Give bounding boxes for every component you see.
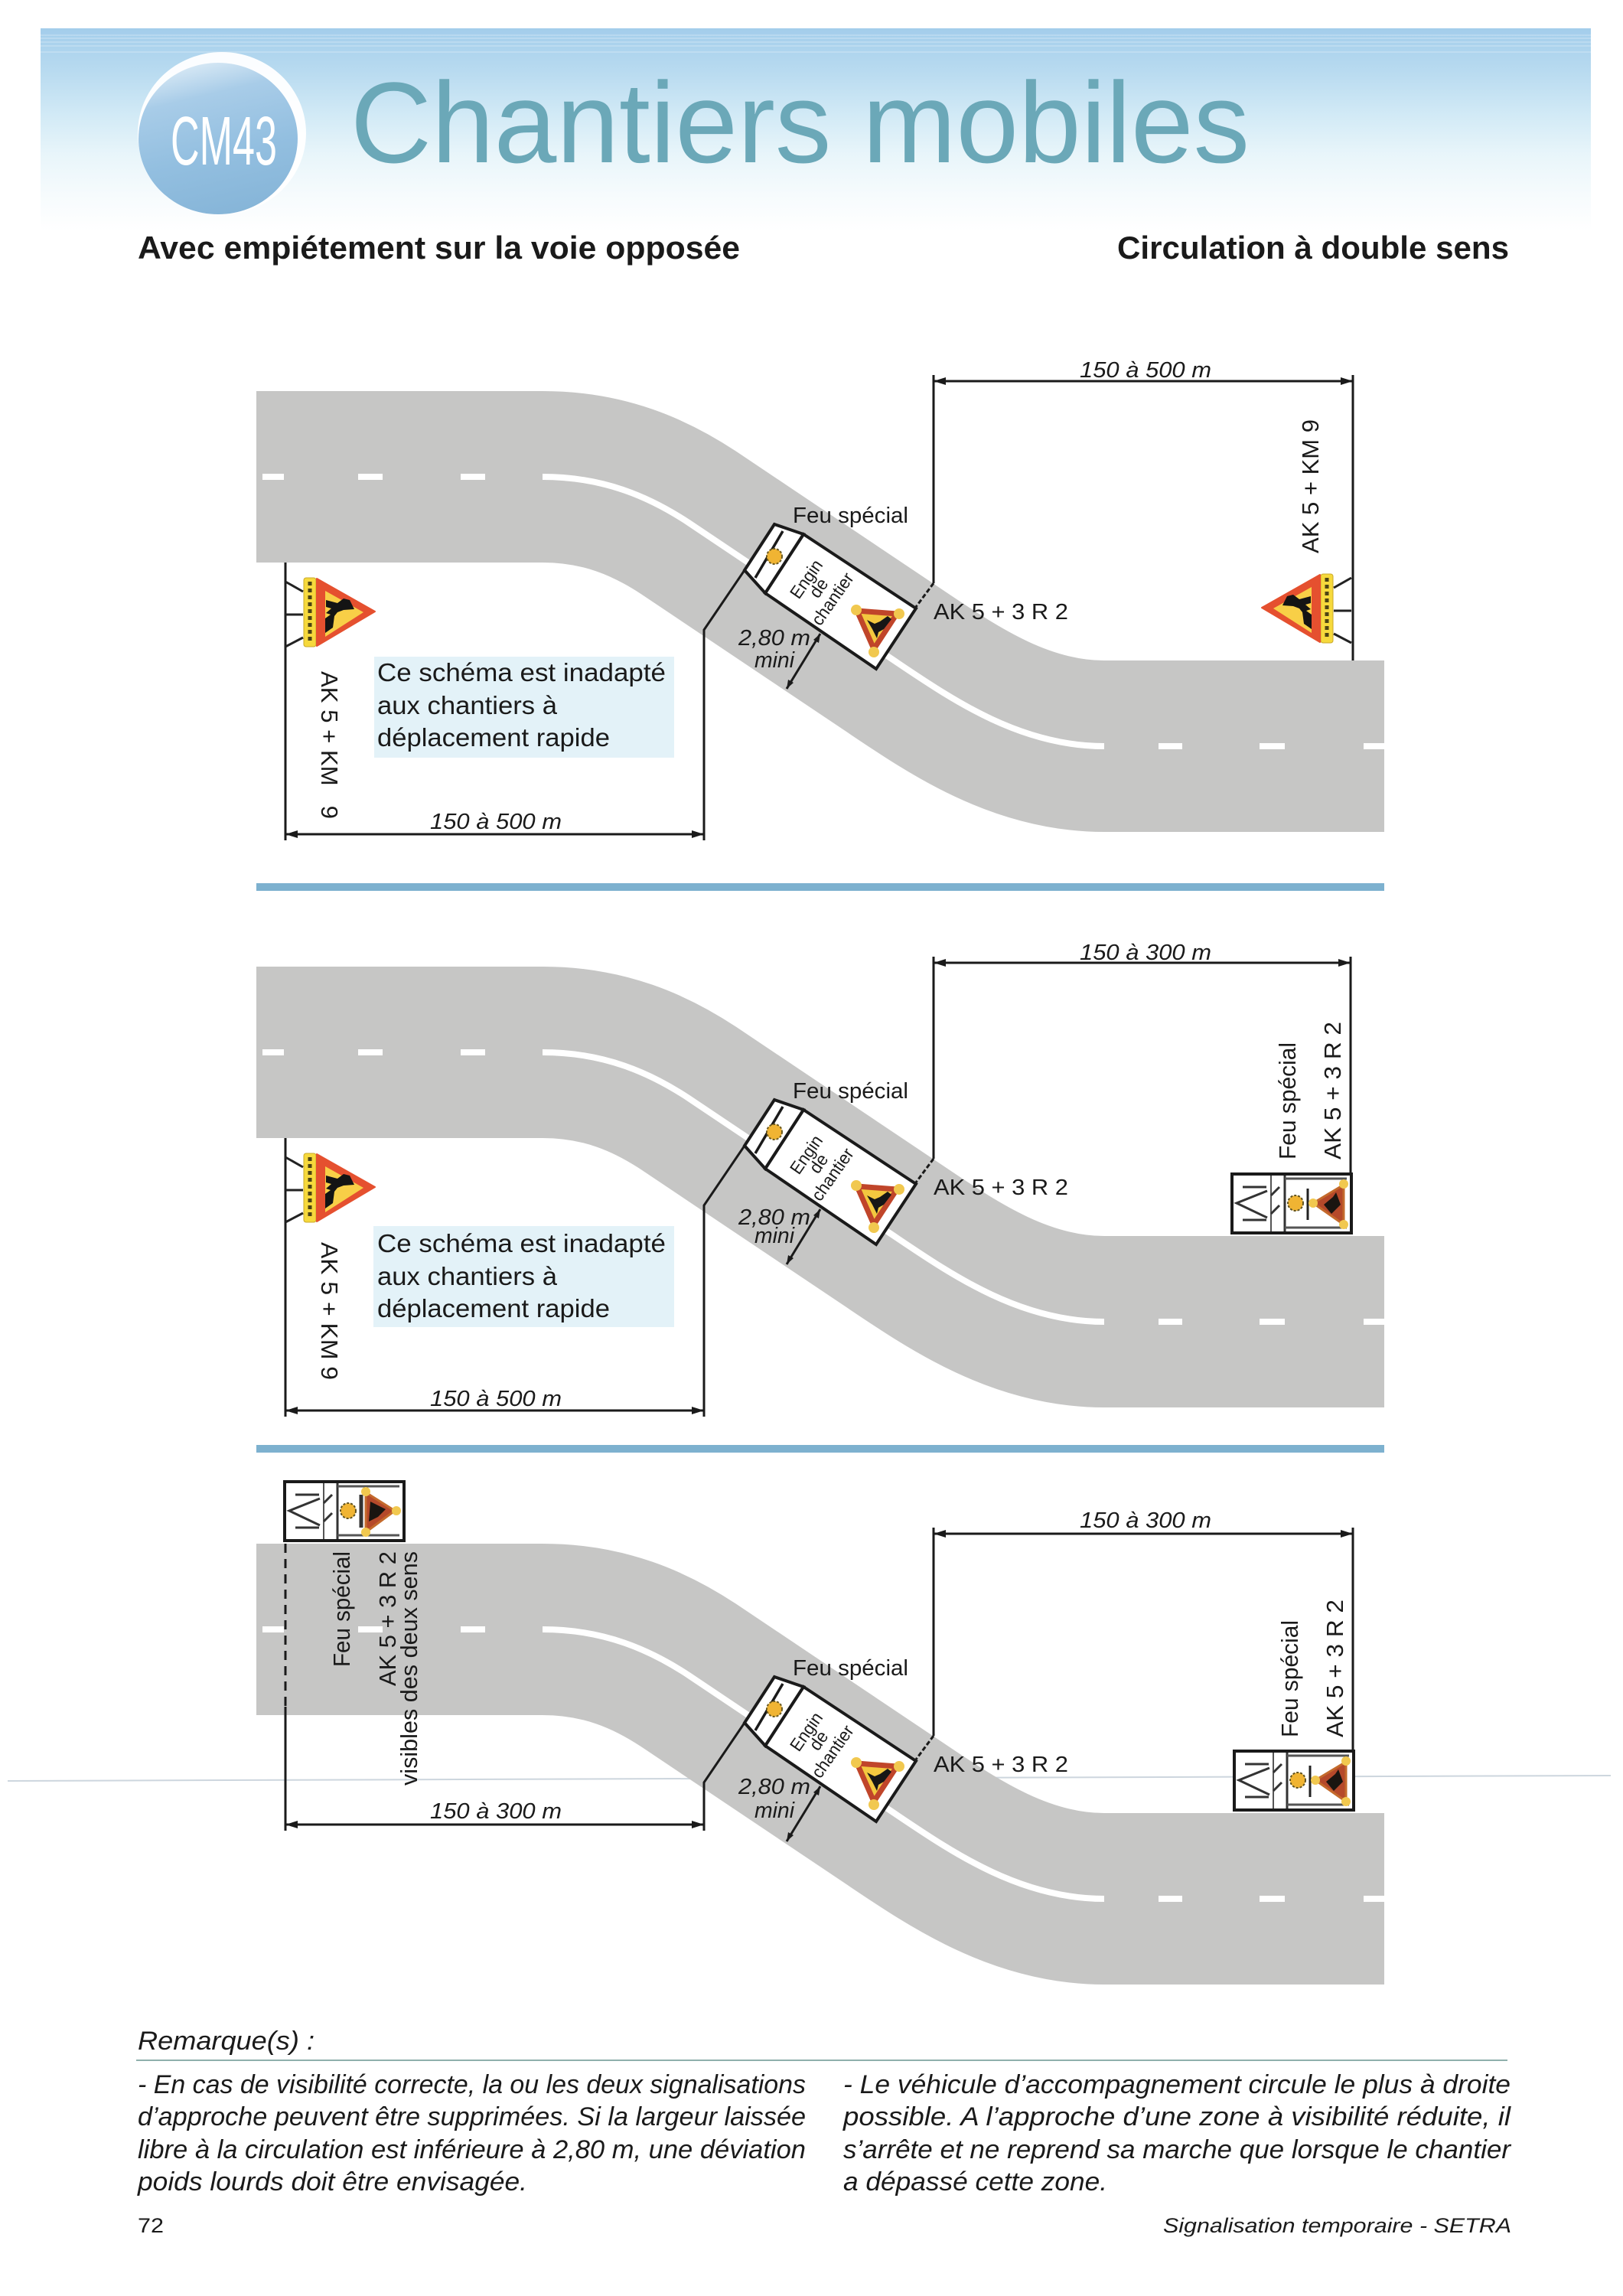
road 1 <box>256 474 1384 749</box>
work vehicle 3 <box>745 1677 916 1821</box>
dimension lines 3 <box>285 1528 1353 1841</box>
vehicle label 3: de <box>805 1727 832 1754</box>
vehicle label 1: chantier <box>807 569 858 629</box>
label: width 1: 2,80 m <box>738 626 810 651</box>
header band <box>41 28 1591 231</box>
remarks right column: possible. A l’approche d’une zone à visibilité réduite, il <box>842 2102 1512 2131</box>
label: width 1: mini <box>754 648 796 673</box>
badge: CM43 <box>138 52 306 214</box>
remarks left column: poids lourds doit être envisagée. <box>137 2167 527 2197</box>
label: width 3 <box>738 1775 810 1823</box>
label: AK5 + KM9 left 1: AK 5 + KM 9 <box>316 671 343 819</box>
note panel 2: déplacement rapide <box>377 1294 610 1322</box>
sign left 1 <box>285 578 375 647</box>
label: Feu spécial 3: Feu spécial <box>793 1656 908 1681</box>
label: width 3: mini <box>754 1799 796 1823</box>
label: AK5 + 3 R2 1: AK 5 + 3 R 2 <box>934 600 1068 625</box>
vehicle label 1: de <box>805 574 832 602</box>
note panel 2: Ce schéma est inadapté <box>377 1229 666 1257</box>
distance top 3: 150 à 300 m <box>1080 1508 1211 1533</box>
label: width 3: 2,80 m <box>738 1775 810 1799</box>
diagram 1 <box>256 358 1384 840</box>
label: AK5 + KM9 left 2: AK 5 + KM 9 <box>316 1242 343 1380</box>
distance top 1: 150 à 500 m <box>1080 358 1211 383</box>
label: AK5 + 3 R2 vertical 3: AK 5 + 3 R 2 <box>1322 1600 1348 1737</box>
label: width 2 <box>738 1205 810 1248</box>
subtitle right: Circulation à double sens <box>1117 230 1509 266</box>
label: Feu spécial 1: Feu spécial <box>793 504 908 528</box>
note panel 2 <box>373 1226 674 1327</box>
label: width 1 <box>738 626 810 673</box>
diagram 2 <box>256 941 1384 1417</box>
work vehicle 2 <box>745 1100 916 1244</box>
vehicle label 2: de <box>805 1150 832 1177</box>
remarks right column <box>842 2070 1512 2197</box>
title: Chantiers mobiles <box>350 58 1250 187</box>
badge: CM43: CM43 <box>171 103 277 180</box>
truck right 2 <box>1232 1174 1351 1233</box>
note panel 1: aux chantiers à <box>377 691 558 719</box>
dimension lines 1 <box>285 375 1353 840</box>
note panel 1 <box>374 657 674 758</box>
left labels 3: Feu spécial <box>328 1551 355 1667</box>
remarks right column: a dépassé cette zone. <box>843 2167 1107 2197</box>
distance bottom 3: 150 à 300 m <box>430 1799 562 1824</box>
left labels 3: visibles des deux sens <box>396 1551 422 1786</box>
sign right 1 <box>1262 574 1351 643</box>
dimension lines 2 <box>285 957 1351 1417</box>
left labels 3 <box>328 1551 422 1786</box>
label: width 2: mini <box>754 1224 796 1248</box>
left labels 3: AK 5 + 3 R 2 <box>374 1551 401 1686</box>
vehicle label 1 <box>786 556 858 629</box>
distance bottom 2: 150 à 500 m <box>430 1387 562 1411</box>
vehicle label 3: chantier <box>807 1721 858 1782</box>
truck right 3 <box>1234 1751 1354 1810</box>
remarks left column: libre à la circulation est inférieure à 2,80 m, une déviation <box>138 2135 806 2164</box>
label: AK5 + 3 R2 vertical 2: AK 5 + 3 R 2 <box>1319 1022 1346 1159</box>
label: AK5 + 3 R2 3: AK 5 + 3 R 2 <box>934 1753 1068 1777</box>
work vehicle 1 <box>745 524 916 669</box>
note panel 2: aux chantiers à <box>377 1262 558 1290</box>
road 3 <box>256 1626 1384 1902</box>
page number: 72 <box>138 2214 164 2237</box>
vehicle label 2: Engin <box>786 1131 826 1178</box>
remarks left column: - En cas de visibilité correcte, la ou les deux signalisations <box>138 2070 806 2099</box>
vehicle label 2: chantier <box>807 1144 858 1205</box>
remarks right column: - Le véhicule d’accompagnement circule le plus à droite <box>843 2070 1511 2099</box>
label: Feu spécial 2: Feu spécial <box>793 1079 908 1104</box>
label: AK5 + KM9 right 1: AK 5 + KM 9 <box>1297 419 1324 553</box>
note panel 1: Ce schéma est inadapté <box>377 658 666 687</box>
footer credit: Signalisation temporaire - SETRA <box>1163 2214 1511 2237</box>
diagram 3 <box>256 1482 1384 1902</box>
label: AK5 + 3 R2 2: AK 5 + 3 R 2 <box>934 1176 1068 1200</box>
road 2 <box>256 1049 1384 1325</box>
label: Feu spécial vertical 3: Feu spécial <box>1276 1620 1303 1737</box>
remarks left column <box>137 2070 806 2197</box>
label: Feu spécial vertical 2: Feu spécial <box>1274 1042 1301 1159</box>
remarks right column: s’arrête et ne reprend sa marche que lorsque le chantier <box>843 2135 1512 2164</box>
distance bottom 1: 150 à 500 m <box>430 810 562 834</box>
label: width 2: 2,80 m <box>738 1205 810 1230</box>
divider 1 <box>256 883 1384 891</box>
remarks left column: d’approche peuvent être supprimées. Si la largeur laissée <box>138 2102 806 2131</box>
divider 2 <box>256 1445 1384 1453</box>
note panel 1: déplacement rapide <box>377 723 610 752</box>
distance top 2: 150 à 300 m <box>1080 941 1211 965</box>
vehicle label 2 <box>786 1131 858 1205</box>
subtitle left: Avec empiétement sur la voie opposée <box>138 230 740 266</box>
sign left 2 <box>285 1153 375 1222</box>
remarks heading: Remarque(s) : <box>138 2027 314 2056</box>
vehicle label 3 <box>786 1708 858 1782</box>
vehicle label 1: Engin <box>786 556 826 602</box>
vehicle label 3: Engin <box>786 1708 826 1755</box>
truck left 3 <box>285 1482 404 1541</box>
scan line <box>8 1776 1611 1781</box>
